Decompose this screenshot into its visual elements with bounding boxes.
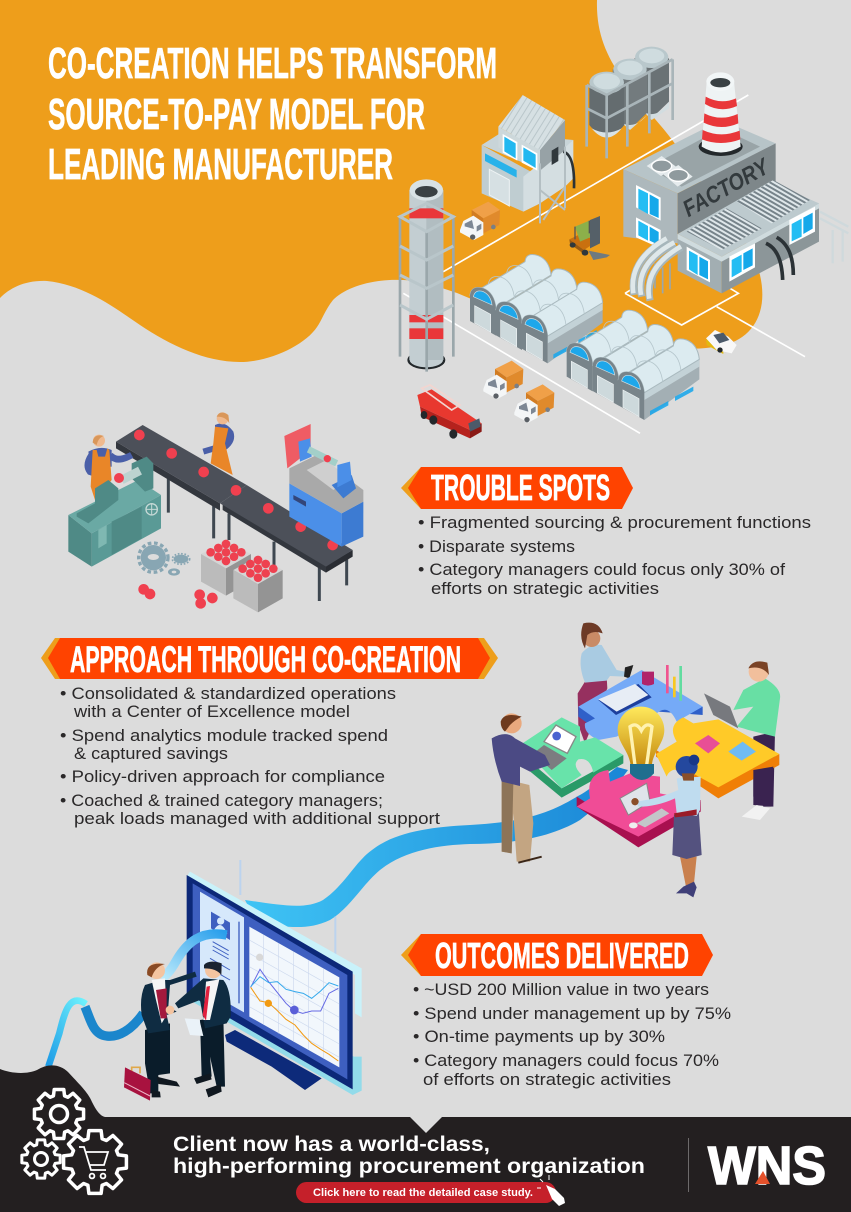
- list: outcomes: • Category managers could focus 70%: [413, 1051, 719, 1070]
- list: trouble spots: • Fragmented sourcing & procurement functions: [418, 513, 811, 532]
- icon: chimney stack: [699, 72, 743, 156]
- icon: blue machine: [284, 424, 363, 547]
- icon: shopping cart: [79, 1147, 108, 1178]
- list: outcomes: [413, 980, 731, 1089]
- ribbon: swoosh lower: [48, 934, 227, 1067]
- icon: man in suit at laptop: [492, 713, 550, 863]
- icon: side pipes: [820, 212, 848, 263]
- panel: outcomes delivered: [401, 934, 731, 1089]
- heading badge: outcomes: OUTCOMES DELIVERED: [435, 935, 689, 976]
- icon: pointer hand: [537, 1175, 565, 1206]
- icon: businessman left: [141, 962, 197, 1097]
- icon: light bulb: [618, 707, 664, 780]
- illustration: puzzle team: [492, 623, 780, 897]
- icon: conveyor legs: [168, 478, 347, 601]
- list: approach: • Consolidated & standardized operations: [60, 684, 396, 703]
- heading badge: outcomes: [401, 934, 713, 976]
- icon: black ducts: [766, 237, 793, 280]
- list: approach: • Coached & trained category managers;: [60, 791, 383, 810]
- icon: silos: [587, 47, 673, 158]
- divider: [688, 1138, 690, 1192]
- icon: rooftop fans: [647, 156, 693, 187]
- icon: puzzle piece green: [520, 717, 623, 798]
- title: [48, 39, 497, 189]
- icon: briefcase: [124, 1067, 151, 1101]
- icon: storage sheds: [470, 255, 699, 420]
- list: approach: • Spend analytics module tracked spend: [60, 726, 388, 745]
- icon: car: [706, 330, 737, 354]
- hanging wires: [240, 860, 335, 975]
- ribbon: connecting swoosh: [245, 767, 628, 927]
- list: outcomes: • Spend under management up by 75%: [413, 1004, 731, 1023]
- logo: WNS: WNS: [708, 1136, 826, 1196]
- icon: woman at tablet: [631, 755, 702, 897]
- icon: top gear: [34, 1089, 84, 1139]
- list: trouble spots: • Category managers could focus only 30% of: [418, 560, 785, 579]
- list: approach: [60, 684, 440, 828]
- title: LEADING MANUFACTURER: [48, 140, 393, 189]
- icon: puzzle piece yellow: [656, 717, 779, 798]
- icon: puzzle piece pink: [577, 770, 701, 847]
- icon: large gear: [64, 1131, 126, 1193]
- icon: gears with cart: [22, 1089, 126, 1193]
- heading badge: trouble spots: TROUBLE SPOTS: [431, 467, 610, 508]
- list: outcomes: • ~USD 200 Million value in two years: [413, 980, 709, 999]
- footer message: high-performing procurement organization: [173, 1155, 645, 1178]
- icon: chimney tower: [400, 179, 453, 372]
- orange wave background: [0, 0, 762, 362]
- button: read case study: Click here to read the detailed case study.: [313, 1187, 533, 1199]
- illustration: handshake at dashboard: [48, 860, 362, 1101]
- heading badge: approach: APPROACH THROUGH CO-CREATION: [70, 639, 461, 680]
- icon: man with laptop: [704, 661, 780, 820]
- icon: man's legs behind yellow piece: [753, 767, 773, 807]
- list: approach: peak loads managed with additional support: [74, 809, 440, 828]
- icon: loose products: [138, 584, 218, 609]
- list: approach: • Policy-driven approach for compliance: [60, 767, 385, 786]
- title: CO-CREATION HELPS TRANSFORM: [48, 39, 497, 88]
- list: trouble spots: efforts on strategic activities: [431, 579, 659, 598]
- icon: delivery trucks: [483, 361, 554, 423]
- icon: crates of products: [201, 540, 283, 612]
- icon: delivery truck: [460, 202, 500, 240]
- footer panel: [0, 1065, 851, 1212]
- label: factory sign: FACTORY: [678, 152, 775, 222]
- icon: forklift: [569, 216, 610, 260]
- list: outcomes: of efforts on strategic activities: [423, 1070, 671, 1089]
- list: outcomes: • On-time payments up by 30%: [413, 1027, 665, 1046]
- title: SOURCE-TO-PAY MODEL FOR: [48, 90, 425, 139]
- icon: gears: [139, 543, 190, 576]
- illustration: factory complex: [400, 47, 848, 439]
- button: read case study: [296, 1182, 556, 1203]
- road lines: [403, 95, 805, 433]
- icon: woman with phone: [578, 623, 633, 743]
- footer message: [173, 1133, 645, 1178]
- icon: worker right: [203, 412, 234, 475]
- list: trouble spots: • Disparate systems: [418, 537, 575, 556]
- list: trouble spots: [418, 513, 811, 598]
- icon: puzzle piece blue: [578, 665, 703, 740]
- heading badge: trouble spots: [401, 467, 633, 509]
- illustration: production line: [68, 412, 363, 612]
- icon: fire engine: [417, 385, 482, 439]
- icon: conveyor belt: [116, 425, 353, 573]
- list: approach: & captured savings: [74, 744, 228, 763]
- panel: trouble spots: [401, 467, 811, 598]
- icon: monitor: [187, 872, 362, 1095]
- icon: green machine: [68, 457, 161, 567]
- icon: worker left: [88, 435, 132, 500]
- heading badge: approach: [41, 638, 498, 680]
- icon: office building: [482, 95, 574, 223]
- icon: monitor stand: [225, 1030, 322, 1090]
- panel: approach through co-creation: [41, 638, 498, 828]
- list: approach: with a Center of Excellence model: [73, 702, 350, 721]
- footer message: Client now has a world-class,: [173, 1133, 490, 1156]
- icon: businessman right: [175, 962, 231, 1097]
- icon: factory building: [623, 72, 848, 301]
- icon: product balls on belt: [134, 430, 338, 550]
- icon: left gear: [22, 1140, 60, 1178]
- icon: white pipes: [633, 238, 682, 301]
